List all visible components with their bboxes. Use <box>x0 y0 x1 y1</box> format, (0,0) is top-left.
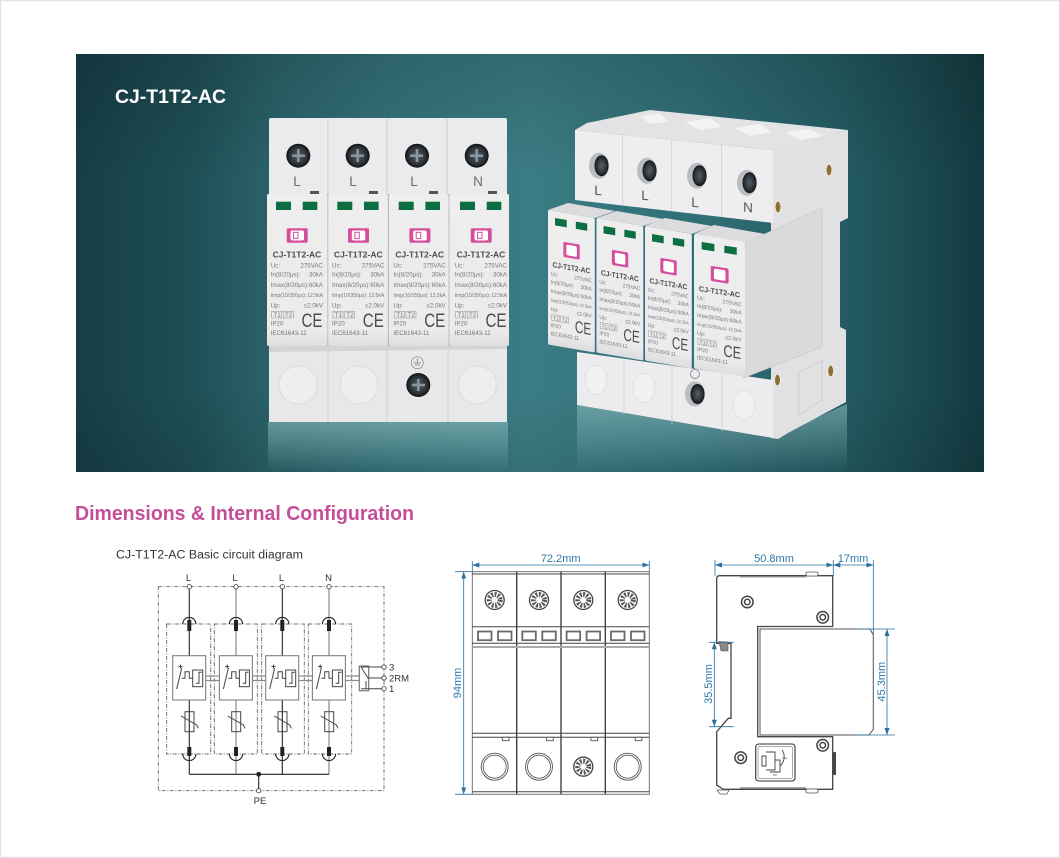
front view: top terminal block: L <box>349 174 357 189</box>
front module 3: T2 <box>408 312 415 319</box>
front module 3: CJ-T1T2-AC <box>395 250 444 260</box>
angled module 1: Imax(8/20μs): <box>551 289 580 300</box>
remote signal relay: 3 <box>389 662 394 674</box>
front module 3: CE <box>424 311 445 332</box>
drawing: side dimensions <box>703 553 895 794</box>
angled module 4: Up: <box>697 331 706 338</box>
angled module 2: Imax(8/20μs): <box>599 297 629 308</box>
dimension: 72.2mm width: 72.2mm <box>541 553 581 565</box>
angled module 2: 60kA <box>629 302 641 310</box>
angled view: housing top, side and terminals: L <box>641 188 649 203</box>
front module 1: IEC61643-11 <box>271 330 307 337</box>
angled module 3: Imax(8/20μs): <box>648 305 677 316</box>
front module 3: Iimp(10/350μs): <box>393 293 429 299</box>
angled module 2: ≤2.0kV <box>625 319 641 328</box>
angled module 4 <box>694 225 765 376</box>
angled module 3: Uc: <box>648 287 655 295</box>
angled module 4: T2 <box>709 341 715 348</box>
angled module 4: In(8/20μs): <box>697 304 723 314</box>
angled module 1: CJ-T1T2-AC <box>552 261 590 276</box>
front module 4: 12.5kA <box>491 293 508 299</box>
terminal labels: L <box>186 573 191 584</box>
front module 4: CJ-T1T2-AC <box>457 250 505 260</box>
panel: product photo banner <box>76 54 984 472</box>
angled module 3: T2 <box>659 333 665 340</box>
front module 1: In(8/20μs): <box>271 272 301 279</box>
angled module 3: T1 <box>650 332 656 339</box>
angled module 2: 275VAC <box>623 283 640 292</box>
angled module 3: Up: <box>648 323 655 330</box>
angled module 1: T1 <box>553 316 559 323</box>
front module 1: 275VAC <box>300 262 324 269</box>
product: front view <box>267 118 509 422</box>
terminal labels: L <box>279 573 284 584</box>
front module 3: Imax(8/20μs): <box>393 282 432 289</box>
front module 2: CJ-T1T2-AC <box>334 250 383 260</box>
front module 2: ≤2.0kV <box>365 302 385 309</box>
side drawing remote switch: RM <box>773 774 777 777</box>
front module 4: T1 <box>458 312 465 319</box>
angled module 4: IP20 <box>697 347 708 355</box>
front view: module backing <box>267 194 509 346</box>
PE bus <box>189 772 329 807</box>
angled module 2: 12.5kA <box>628 310 640 318</box>
circuit column 2 <box>219 584 252 774</box>
front module 1: 30kA <box>309 272 324 279</box>
dimension: 17mm: 17mm <box>838 553 868 565</box>
front module 4: Uc: <box>455 262 464 269</box>
angled view: housing top, side and terminals: L <box>594 183 602 198</box>
front module 3 <box>389 194 448 346</box>
front module 4: 30kA <box>493 272 508 279</box>
angled module 4: Iimp(10/350μs): <box>697 322 727 331</box>
angled module 1: Iimp(10/350μs): <box>551 297 579 307</box>
front module 1: CE <box>302 311 322 332</box>
front module 2: T1 <box>335 312 343 319</box>
front module 3: 30kA <box>432 272 447 279</box>
angled module 4: 30kA <box>730 309 742 317</box>
angled view: bottom terminal block <box>577 352 773 438</box>
front module 4: Up: <box>455 302 465 309</box>
front module 2: Uc: <box>332 262 342 269</box>
front drawing screws <box>485 590 637 776</box>
angled module 3: 275VAC <box>671 291 689 300</box>
front module 2: 60kA <box>370 282 385 289</box>
chart: basic circuit diagram <box>158 573 409 807</box>
front drawing status windows <box>478 632 644 640</box>
front view: top terminal block: L <box>410 174 418 189</box>
front module 2: 30kA <box>370 272 385 279</box>
angled module 2: Uc: <box>599 279 607 287</box>
front module 3: In(8/20μs): <box>393 272 423 279</box>
front module 2: In(8/20μs): <box>332 272 362 279</box>
circuit column 1 <box>173 584 206 774</box>
front module 2: Imax(8/20μs): <box>332 282 370 289</box>
front module 2: CE <box>363 311 384 332</box>
dimension: 72.2mm width <box>472 553 649 572</box>
angled module 1: T2 <box>562 317 568 324</box>
angled module 1: 60kA <box>581 294 592 302</box>
dimension: 17mm <box>834 553 873 635</box>
front module 2: 275VAC <box>362 262 385 269</box>
angled module 2 <box>596 211 664 360</box>
front module 3: ≤2.0kV <box>426 302 447 309</box>
front module 3: Uc: <box>393 262 403 269</box>
front module 3: T1 <box>396 312 404 319</box>
angled module 2: T2 <box>611 325 616 332</box>
front module 4: In(8/20μs): <box>455 272 485 279</box>
front module 4: ≤2.0kV <box>488 302 508 309</box>
angled module 4: Uc: <box>697 295 706 303</box>
angled module 1: Up: <box>551 307 558 314</box>
angled module 3: IP20 <box>648 339 658 347</box>
front module 2: 12.5kA <box>368 293 385 299</box>
angled module 4: IEC61643-11 <box>697 355 728 366</box>
banner title: CJ-T1T2-AC <box>115 87 226 108</box>
side drawing mounting holes <box>735 596 828 764</box>
angled module 1: Uc: <box>551 271 558 279</box>
product: angled view <box>548 110 848 439</box>
angled module 4: T1 <box>700 340 706 347</box>
front module 1: 12.5kA <box>307 293 324 299</box>
side drawing outline <box>717 572 873 794</box>
angled module 1: In(8/20μs): <box>551 279 574 290</box>
angled module 2: 30kA <box>629 293 641 301</box>
angled module 3: In(8/20μs): <box>648 295 671 306</box>
angled view: housing top, side and terminals <box>575 110 848 439</box>
front module 1: T2 <box>285 312 293 319</box>
front module 3: Up: <box>393 302 403 309</box>
front module 2: IEC61643-11 <box>332 330 369 337</box>
front module 1: 60kA <box>309 282 324 289</box>
angled module 3: Iimp(10/350μs): <box>648 313 676 323</box>
front module 3: IP20 <box>393 321 407 328</box>
front module 4: CE <box>486 311 506 332</box>
angled module 4: 12.5kA <box>728 326 742 334</box>
angled module 3: 60kA <box>678 310 689 318</box>
circuit column 3 <box>266 584 299 774</box>
front module 4: IP20 <box>455 321 468 328</box>
angled module 2: IP20 <box>599 331 609 339</box>
front module 2 <box>328 194 388 346</box>
front drawing outline <box>472 572 649 794</box>
dimension: 94mm height: 94mm <box>452 668 464 698</box>
angled module 3: 30kA <box>678 301 689 309</box>
front drawing round covers <box>481 737 642 780</box>
angled module 4: Imax(8/20μs): <box>697 313 730 324</box>
angled module 3 <box>645 218 712 368</box>
remote signal relay <box>359 662 409 695</box>
angled module 4: CE <box>723 341 741 363</box>
side drawing remote switch <box>756 744 795 781</box>
angled module 3: 12.5kA <box>676 318 689 326</box>
terminal labels <box>186 573 332 584</box>
dimension: 50.8mm: 50.8mm <box>754 553 794 565</box>
angled view: housing top, side and terminals: N <box>743 200 753 215</box>
angled module 3: CJ-T1T2-AC <box>649 277 687 292</box>
front module 4: T2 <box>469 312 477 319</box>
angled module 1: IP20 <box>551 323 561 331</box>
front module 3: 60kA <box>432 282 447 289</box>
remote signal relay: 2RM <box>389 674 409 684</box>
circuit column 4 <box>312 584 345 774</box>
angled view: module side face <box>743 208 822 378</box>
mechanical link lines <box>206 676 359 680</box>
angled module 2: Up: <box>599 315 607 322</box>
terminal labels: N <box>325 573 332 584</box>
front module 1: IP20 <box>271 321 284 328</box>
drawing: front dimensions <box>452 553 649 794</box>
front module 2: T2 <box>346 312 354 319</box>
dimension: 50.8mm <box>715 553 833 576</box>
front view: top terminal block: L <box>293 174 301 189</box>
angled module 1: IEC61643-11 <box>551 331 579 342</box>
dimension: 35.5mm: 35.5mm <box>703 664 715 704</box>
PE bus: PE <box>254 796 266 807</box>
front module 1: Uc: <box>271 262 280 269</box>
angled module 3: ≤2.0kV <box>674 327 689 336</box>
front module 1: CJ-T1T2-AC <box>273 250 321 260</box>
angled module 2: In(8/20μs): <box>599 287 623 298</box>
side drawing remote switch: Fuse <box>782 757 788 760</box>
angled view: housing top, side and terminals: L <box>691 195 699 210</box>
front module 4 <box>450 194 509 346</box>
angled module 4: ≤2.0kV <box>725 335 742 344</box>
angled module 4: 275VAC <box>722 299 742 308</box>
angled module 2: CJ-T1T2-AC <box>601 269 639 284</box>
front module 1: ≤2.0kV <box>304 302 324 309</box>
angled module 1: 12.5kA <box>579 302 592 310</box>
front module 4: 275VAC <box>484 262 508 269</box>
angled module 3: CE <box>672 335 688 355</box>
front module 2: Up: <box>332 302 342 309</box>
angled module 1 <box>548 203 615 352</box>
front module 4: 60kA <box>493 282 508 289</box>
front module 4: Iimp(10/350μs): <box>455 293 490 299</box>
front module 1: Imax(8/20μs): <box>271 282 309 289</box>
front view: top terminal block <box>269 118 507 198</box>
front module 3: 275VAC <box>423 262 446 269</box>
angled module 4: CJ-T1T2-AC <box>699 284 741 300</box>
front module 1: T1 <box>274 312 281 319</box>
circuit diagram caption: CJ-T1T2-AC Basic circuit diagram <box>116 550 303 562</box>
terminal labels: L <box>232 573 238 584</box>
dimension: 35.5mm <box>703 642 734 727</box>
angled module 2: T1 <box>602 324 607 331</box>
dimension: 45.3mm: 45.3mm <box>876 662 888 702</box>
front module 1: Up: <box>271 302 281 309</box>
front view: bottom terminal block <box>269 344 507 422</box>
front module 2: IP20 <box>332 321 345 328</box>
front module 1 <box>267 194 327 346</box>
angled module 1: CE <box>575 319 591 339</box>
front module 1: Iimp(10/350μs): <box>271 293 306 299</box>
angled module 1: ≤2.0kV <box>577 311 592 320</box>
angled module 4: 60kA <box>730 318 742 326</box>
front module 2: Iimp(10/350μs): <box>332 293 367 299</box>
section heading: Dimensions & Internal Configuration <box>75 503 414 525</box>
angled module 1: 275VAC <box>574 275 592 284</box>
front module 3: IEC61643-11 <box>393 330 430 337</box>
angled module 1: 30kA <box>581 285 592 293</box>
angled module 2: Iimp(10/350μs): <box>599 305 627 315</box>
front module 4: Imax(8/20μs): <box>455 282 493 289</box>
angled module 3: IEC61643-11 <box>648 347 676 358</box>
remote signal relay: 1 <box>389 684 394 695</box>
front view: top terminal block: N <box>473 174 483 189</box>
front module 4: IEC61643-11 <box>455 330 491 337</box>
angled module 2: CE <box>623 327 640 347</box>
dimension: 45.3mm <box>855 629 895 735</box>
angled module 2: IEC61643-11 <box>599 339 628 350</box>
dimension: 94mm height <box>452 572 472 794</box>
front module 3: 12.5kA <box>430 293 446 299</box>
